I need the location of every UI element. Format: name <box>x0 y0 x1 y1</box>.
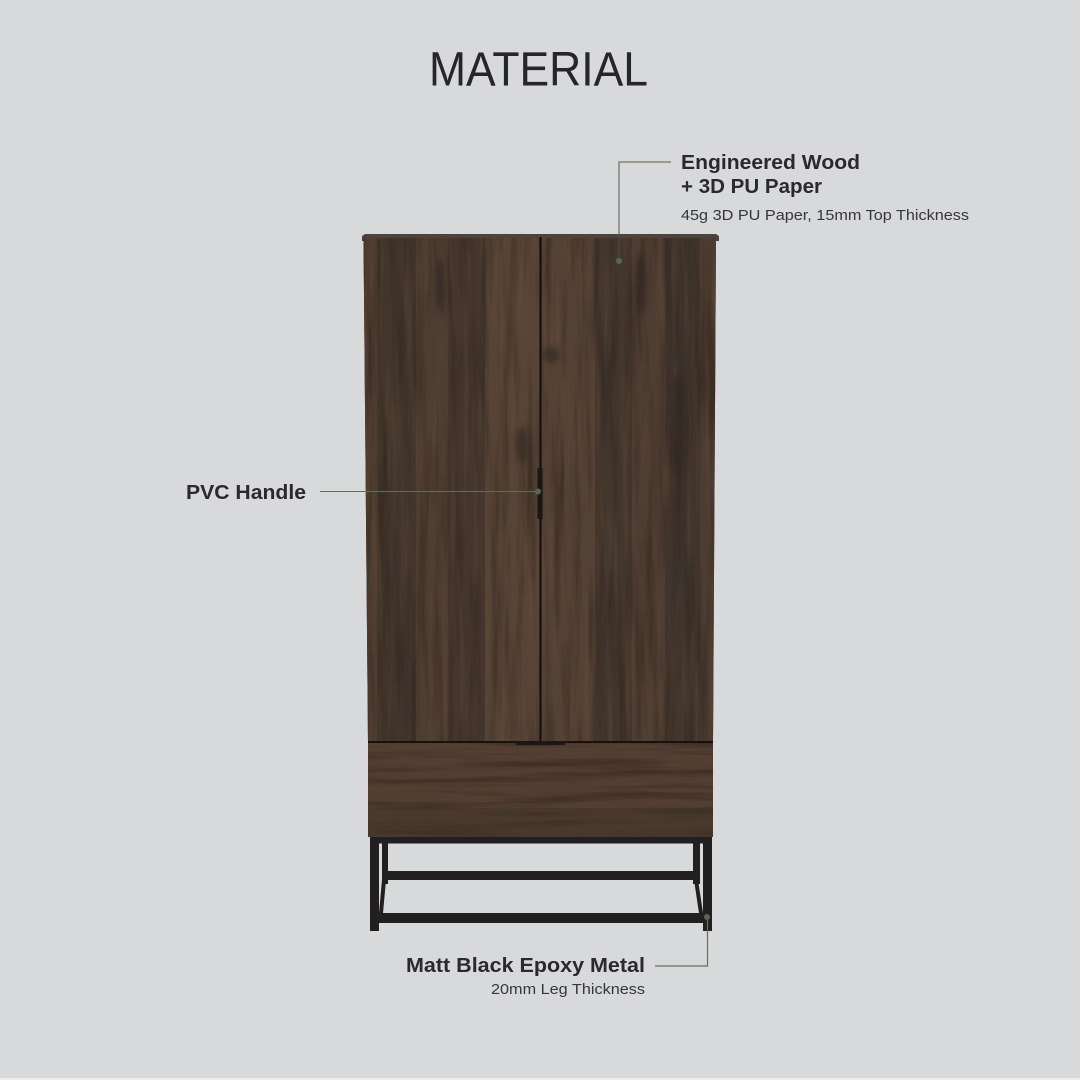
heading: engineered wood: Engineered Wood <box>681 152 860 174</box>
leader line: top, over wood <box>618 234 620 261</box>
title: MATERIAL <box>429 44 648 96</box>
door wood panels <box>360 236 720 746</box>
drawer top seam <box>368 741 713 743</box>
marker dot: bottom <box>704 914 710 920</box>
leader line: handle <box>320 490 538 492</box>
leader line: bottom <box>655 917 708 966</box>
detail: leg thickness: 20mm Leg Thickness <box>491 981 645 998</box>
leader line: top <box>619 162 671 234</box>
door gap <box>540 237 542 743</box>
marker dot: handle <box>535 488 541 494</box>
bottom edge strip <box>0 1078 1080 1080</box>
marker dot: top <box>616 258 622 264</box>
drawer handle <box>516 741 565 745</box>
heading: 3D PU paper: + 3D PU Paper <box>681 176 822 198</box>
callout: engineered wood <box>616 152 969 264</box>
callout: PVC handle <box>186 482 541 504</box>
door handle <box>538 468 542 519</box>
drawer wood panel <box>368 743 713 837</box>
wardrobe illustration <box>360 234 720 931</box>
heading: PVC handle: PVC Handle <box>186 482 306 504</box>
heading: matt black epoxy metal: Matt Black Epoxy Metal <box>406 955 645 977</box>
wardrobe top panel <box>362 234 719 241</box>
metal leg frame <box>370 837 712 931</box>
callout: matt black epoxy metal <box>406 914 710 998</box>
detail: top thickness: 45g 3D PU Paper, 15mm Top Thickness <box>681 207 969 224</box>
